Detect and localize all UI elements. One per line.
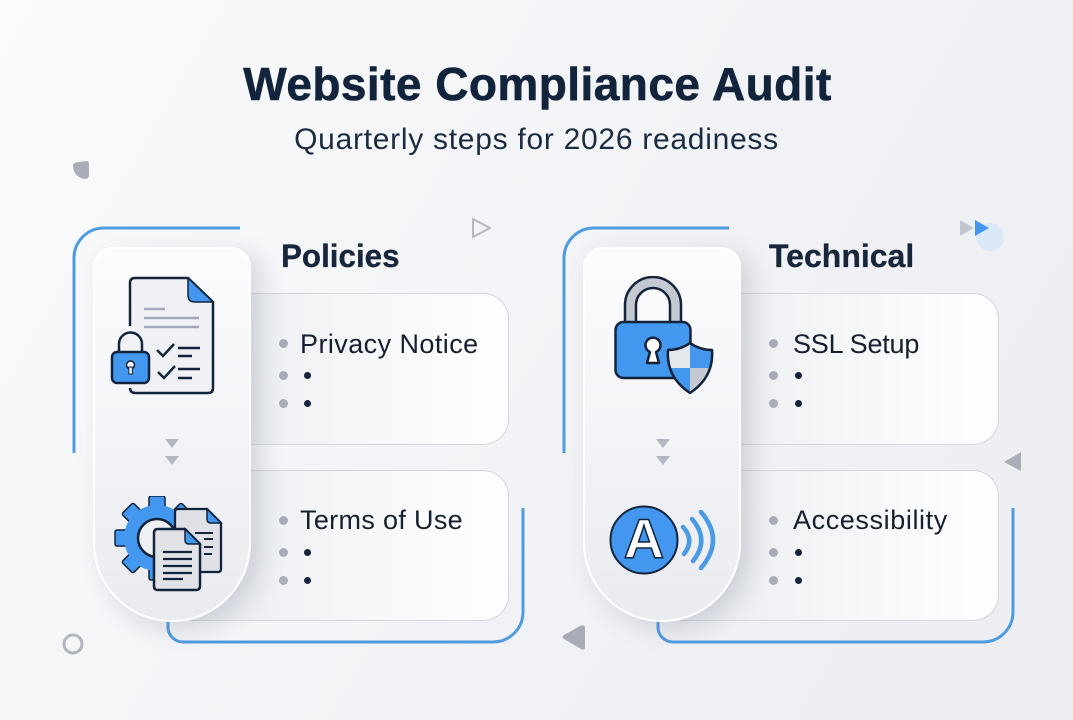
icon: flow arrows (165, 439, 179, 465)
title: Website Compliance Audit (243, 58, 832, 110)
panel: Policies (93, 238, 509, 638)
card: Accessibility: Accessibility (793, 505, 948, 535)
pill: Policies icons (93, 247, 251, 622)
icon: accessibility A with waves (610, 506, 716, 574)
card: SSL Setup (660, 293, 999, 445)
card: Terms of Use: Terms of Use (300, 505, 463, 535)
card: Privacy Notice (170, 293, 509, 445)
icon: flow arrows (656, 439, 670, 465)
card: Accessibility (660, 470, 999, 621)
subtitle: Quarterly steps for 2026 readiness (294, 123, 779, 156)
icon: gear with documents (114, 496, 223, 592)
card: Privacy Notice: Privacy Notice (300, 329, 479, 359)
icon: policy document with lock (110, 276, 214, 394)
icon: accessibility A with waves: A (624, 507, 664, 570)
card: Terms of Use (170, 470, 509, 621)
icon: padlock with shield (614, 276, 714, 394)
pill: Technical icons (583, 247, 741, 622)
panel: Technical (583, 238, 999, 638)
card: SSL Setup: SSL Setup (793, 329, 919, 359)
heading: Policies: Policies (281, 238, 400, 274)
heading: Technical: Technical (769, 238, 914, 274)
